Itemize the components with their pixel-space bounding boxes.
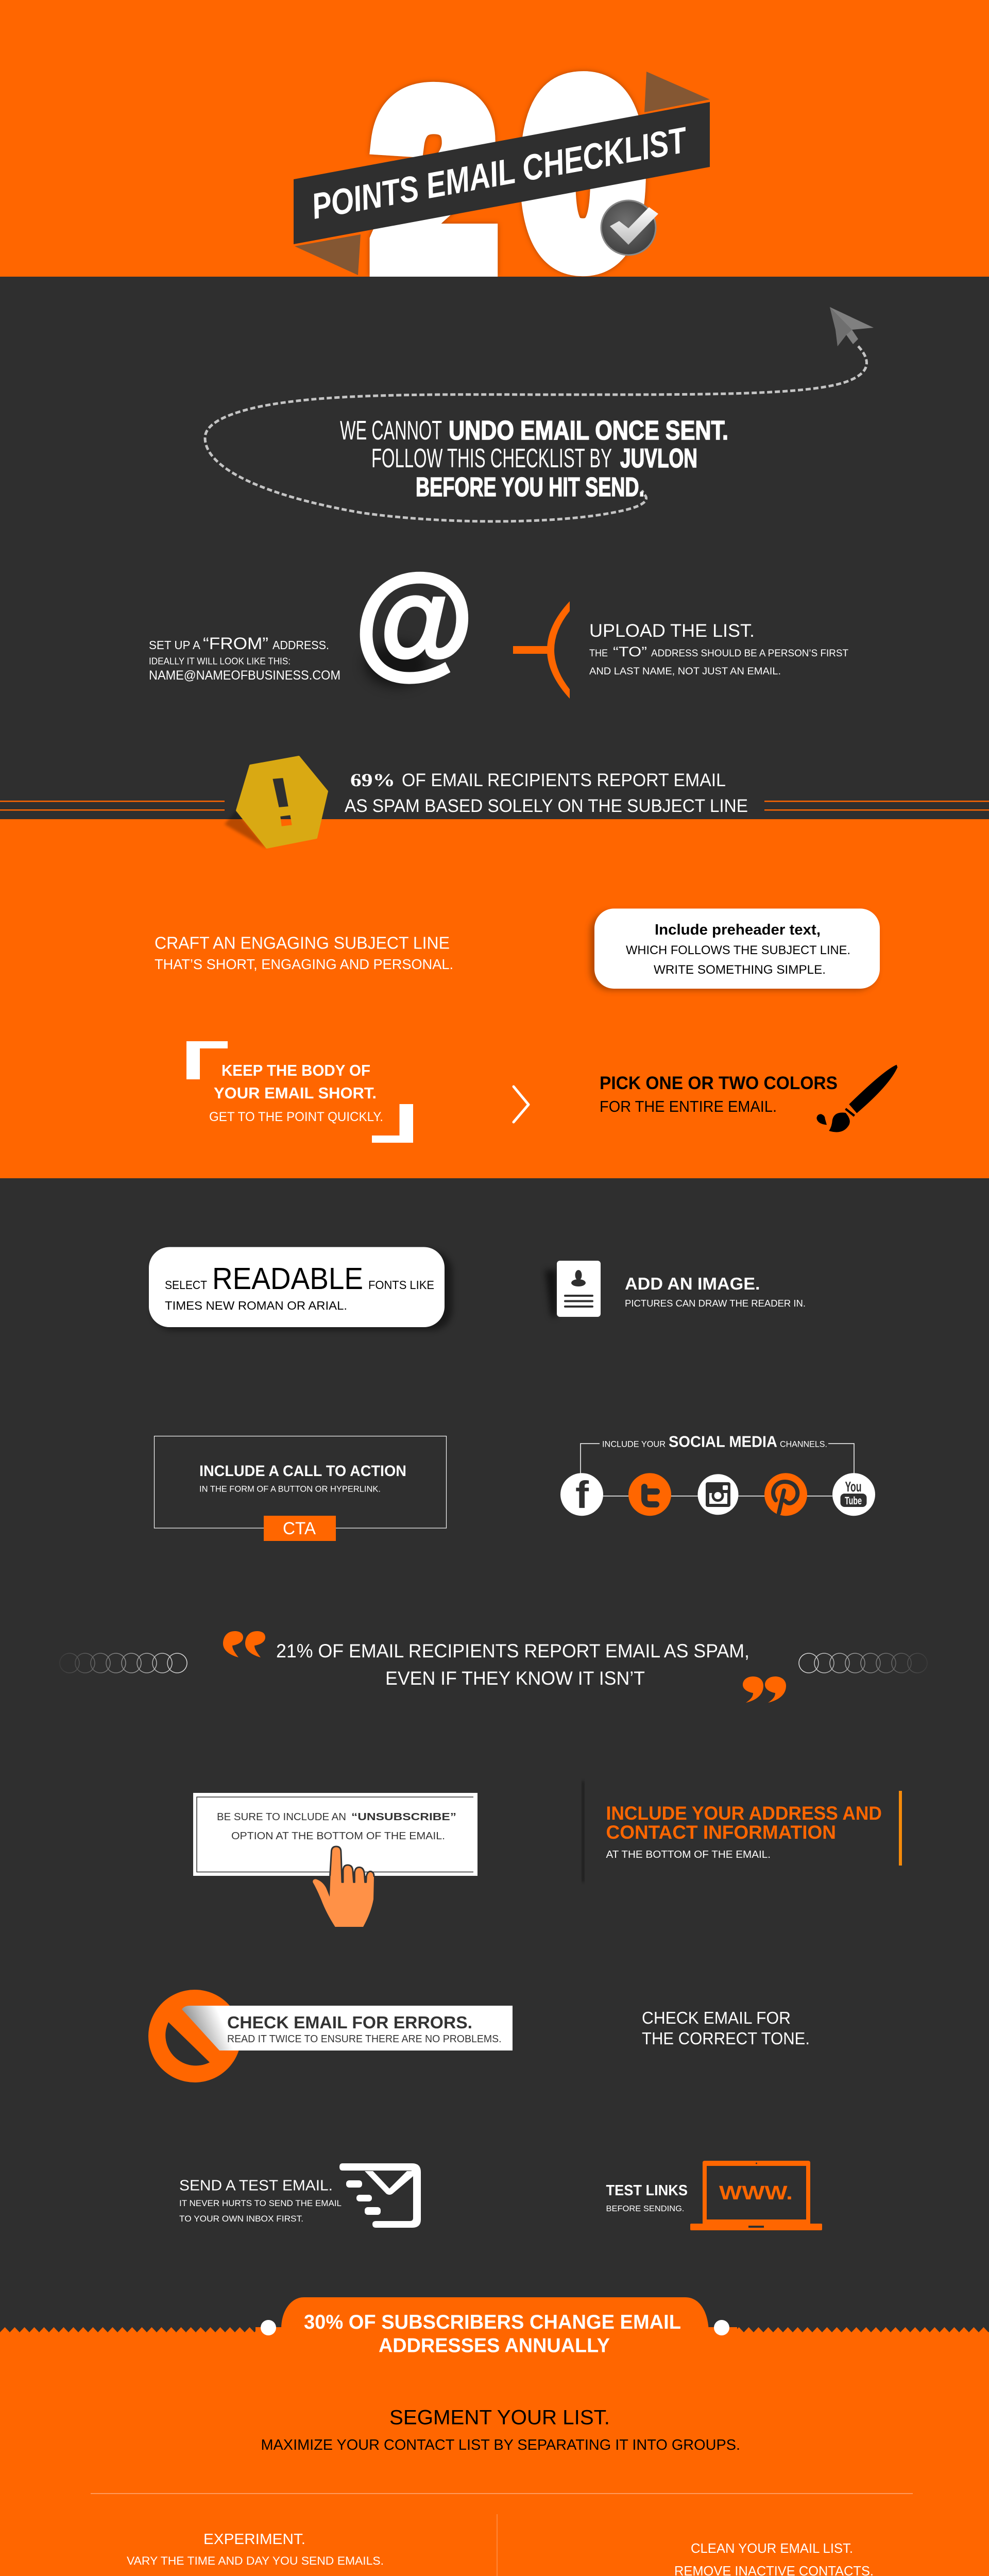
text block: intro statement: JUVLON [620,444,697,473]
ribbon fold bottom [295,234,361,275]
stat: 69 percent [345,770,748,816]
corner bracket top left [186,1041,228,1079]
text block: add an image: ADD AN IMAGE. [625,1274,760,1293]
decorative rings right [799,1653,927,1673]
social heading [602,1432,827,1451]
text block: correct tone: THE CORRECT TONE. [642,2029,810,2048]
panel: orange footer section [0,2332,989,2576]
icon: twitter [628,1473,671,1516]
panel: dark checklist background [0,277,989,2332]
icon: warning hexagon [225,757,327,849]
icon: laptop with www [690,2161,822,2230]
text block: subject line: THAT’S SHORT, ENGAGING AND PERSONAL. [155,956,453,972]
stat tab: 30 percent of subscribers [255,2297,737,2357]
social heading: CHANNELS. [780,1439,827,1449]
text block: pick colors: FOR THE ENTIRE EMAIL. [600,1097,777,1115]
text block: correct tone: CHECK EMAIL FOR [642,2009,791,2028]
callout: keep the body short: YOUR EMAIL SHORT. [214,1084,377,1102]
connector lines [581,1444,854,1496]
icon: laptop with www: WWW. [719,2182,793,2204]
text block: upload the list [589,621,848,677]
dashed flight path [205,346,866,521]
icon: pointing hand [313,1846,374,1927]
text block: pick colors [600,1073,838,1115]
text block: address and contact [582,1781,902,1882]
pin right [714,2320,729,2335]
panel: orange subject line section [0,819,989,1178]
text block: segment your list [261,2406,740,2453]
callout: preheader text: Include preheader text, [655,922,821,938]
banner: check for errors: CHECK EMAIL FOR ERRORS. [227,2013,472,2032]
big number 20 [373,36,641,315]
icon: facebook: f [575,1473,589,1516]
text block: subject line: CRAFT AN ENGAGING SUBJECT LINE [155,934,450,952]
text block: from address: ADDRESS. [272,638,329,652]
text block: test links [606,2182,688,2213]
callout: preheader text: WRITE SOMETHING SIMPLE. [654,963,826,977]
text block: upload the list: THE [589,648,608,659]
big number 20: 0 [525,36,641,310]
text block: from address: SET UP A [149,638,201,652]
ribbon text: POINTS EMAIL CHECKLIST [309,120,691,227]
ribbon fold top [644,72,710,112]
callout: keep the body short: GET TO THE POINT QUICKLY. [209,1110,383,1124]
text block: intro statement [340,416,728,502]
callout: call to action: INCLUDE A CALL TO ACTION [199,1463,406,1480]
callout: unsubscribe: OPTION AT THE BOTTOM OF THE EMAIL. [231,1830,445,1842]
text block: from address: NAME@NAMEOFBUSINESS.COM [149,668,340,683]
text block: send a test email [179,2177,342,2224]
text block: clean your list: CLEAN YOUR EMAIL LIST. [691,2540,853,2556]
icon: image card [545,1261,601,1317]
icon: orange bracket [513,601,570,699]
callout: readable fonts [149,1247,452,1330]
callout: preheader text [590,909,880,990]
icon: check badge [601,200,658,255]
text block: clean your list [674,2540,874,2576]
intro: flight path and paper plane [205,307,874,521]
panel: top orange header [0,0,989,277]
callout: unsubscribe [193,1793,478,1927]
text block: experiment [127,2531,384,2576]
social heading: SOCIAL MEDIA [669,1432,777,1451]
callout: readable fonts: FONTS LIKE [368,1278,434,1292]
text block: from address: “FROM” [203,634,268,653]
text block: intro statement: FOLLOW THIS CHECKLIST BY [371,444,612,473]
text block: address and contact: AT THE BOTTOM OF THE EMAIL. [606,1849,771,1860]
CTA button: CTA [283,1519,316,1538]
quote stat: 21 percent: EVEN IF THEY KNOW IT ISN’T [385,1667,645,1689]
text block: send a test email: TO YOUR OWN INBOX FIRST. [179,2214,303,2224]
text block: subject line [155,934,453,972]
text block: test links: BEFORE SENDING. [606,2205,684,2213]
text block: from address [149,634,340,683]
corner bracket bottom right [372,1104,413,1143]
decorative rings left [60,1653,187,1673]
text block: upload the list: ADDRESS SHOULD BE A PERSON’S FIRST [651,648,848,659]
callout: preheader text: WHICH FOLLOWS THE SUBJECT LINE. [626,943,850,957]
title: 20 points email checklist [294,36,710,315]
quote stat: 21 percent: 21% OF EMAIL RECIPIENTS REPORT EMAIL AS SPAM, [276,1640,749,1662]
icon: fast envelope [339,2163,421,2228]
text block: send a test email: IT NEVER HURTS TO SEND THE EMAIL [179,2198,342,2208]
banner: check for errors: READ IT TWICE TO ENSURE THERE ARE NO PROBLEMS. [227,2033,502,2045]
stat tab: 30 percent of subscribers: ADDRESSES ANNUALLY [379,2335,610,2357]
text block: experiment: EXPERIMENT. [203,2531,305,2548]
callout: readable fonts: TIMES NEW ROMAN OR ARIAL. [165,1299,347,1312]
dividers [91,2493,913,2576]
text block: upload the list: “TO” [613,644,647,659]
text block: add an image [625,1274,806,1309]
callout: unsubscribe: “UNSUBSCRIBE” [351,1811,456,1823]
icon: opening quote [223,1631,265,1657]
text block: test links: TEST LINKS [606,2182,688,2199]
icon: youtube: Tube [845,1495,862,1507]
text block: address and contact: CONTACT INFORMATION [606,1821,836,1843]
ribbon [294,102,710,244]
callout: call to action: IN THE FORM OF A BUTTON OR HYPERLINK. [199,1484,381,1494]
text block: address and contact: INCLUDE YOUR ADDRESS AND [606,1802,882,1824]
decorative zigzag edge [0,2327,989,2332]
stat: 69 percent: 69% [350,770,395,790]
callout: unsubscribe: BE SURE TO INCLUDE AN [217,1811,346,1823]
callout: call to action [155,1436,446,1541]
stat: 69 percent: AS SPAM BASED SOLELY ON THE SUBJECT LINE [345,796,748,816]
icon: at sign: @ [354,549,474,689]
icon: paint brush [816,1065,897,1132]
icon: youtube [832,1473,875,1516]
callout: keep the body short: KEEP THE BODY OF [221,1061,370,1079]
callout: readable fonts: SELECT [165,1278,207,1292]
text block: segment your list: MAXIMIZE YOUR CONTACT LIST BY SEPARATING IT INTO GROUPS. [261,2437,740,2453]
pin left [261,2320,276,2335]
banner: check for errors [182,2006,513,2050]
stat tab: 30 percent of subscribers: 30% OF SUBSCRIBERS CHANGE EMAIL [304,2311,681,2333]
icon: no entry sign with banner [148,1990,513,2082]
big number 20: 2 [373,44,495,315]
text block: pick colors: PICK ONE OR TWO COLORS [600,1073,838,1093]
social media channels [560,1432,875,1516]
decorative side lines [0,801,989,811]
text block: upload the list: AND LAST NAME, NOT JUST AN EMAIL. [589,666,781,677]
text block: upload the list: UPLOAD THE LIST. [589,621,755,641]
text block: correct tone [642,2009,810,2048]
social heading: INCLUDE YOUR [602,1439,666,1449]
icon: instagram [697,1474,739,1515]
icon: youtube: You [845,1479,861,1495]
text block: add an image: PICTURES CAN DRAW THE READER IN. [625,1298,806,1309]
icon: chevron arrow [514,1087,528,1122]
stat: 69 percent: OF EMAIL RECIPIENTS REPORT EMAIL [402,770,726,790]
text block: intro statement: UNDO EMAIL ONCE SENT. [449,416,728,446]
text block: intro statement: WE CANNOT [340,416,442,446]
callout: keep the body short [186,1041,413,1143]
icon: pinterest [764,1473,807,1516]
text block: from address: IDEALLY IT WILL LOOK LIKE THIS: [149,656,291,667]
text block: send a test email: SEND A TEST EMAIL. [179,2177,333,2194]
icon: closing quote [743,1676,786,1703]
text block: experiment: VARY THE TIME AND DAY YOU SEND EMAILS. [127,2554,384,2567]
CTA button [264,1516,336,1541]
text block: intro statement: BEFORE YOU HIT SEND. [416,472,644,502]
callout: readable fonts: READABLE [212,1262,363,1296]
text block: segment your list: SEGMENT YOUR LIST. [389,2406,610,2429]
icon: facebook [560,1473,603,1516]
icon: paper plane [830,307,874,346]
quote stat: 21 percent [223,1631,786,1703]
